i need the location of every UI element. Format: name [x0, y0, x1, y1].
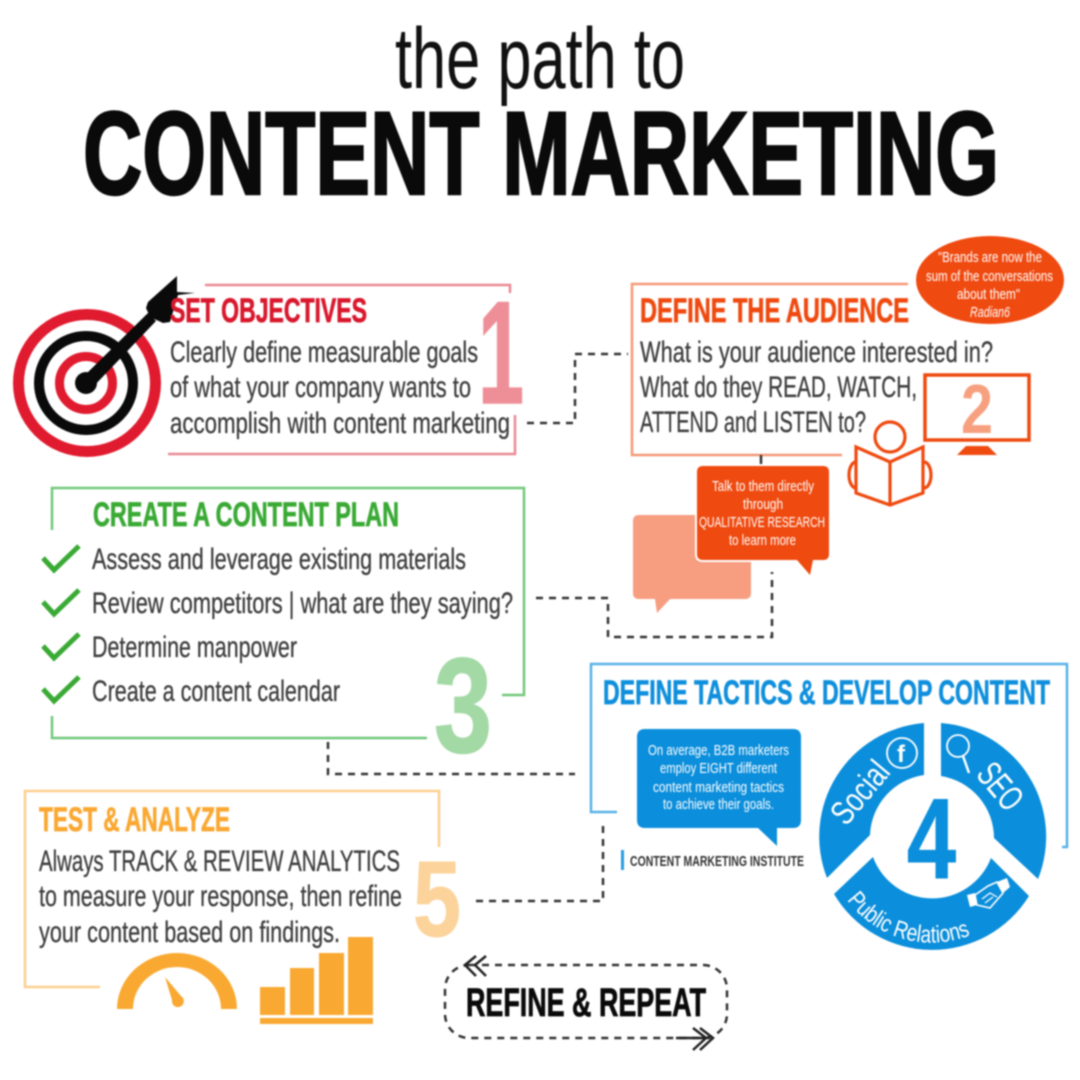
- title: the path to: [395, 11, 685, 107]
- chart: tactics wheel: [818, 722, 1048, 951]
- speech bubble: B2B statistic: content marketing tactics: [653, 779, 784, 796]
- segment: social: [819, 723, 924, 878]
- text: objectives description: of what your company wants to: [170, 371, 471, 404]
- connector: step 2 to step 3: [536, 572, 772, 637]
- text: analytics description: to measure your response, then refine: [39, 880, 402, 913]
- icon: check marks: [43, 546, 79, 701]
- speech bubble: qualitative research: QUALITATIVE RESEARCH: [699, 514, 825, 531]
- text: objectives description: [170, 336, 510, 440]
- segment: social: Social: [823, 753, 898, 832]
- speech bubble: salmon: [633, 515, 751, 613]
- checklist: [43, 543, 513, 708]
- source: content marketing institute: [621, 850, 804, 870]
- text: objectives description: accomplish with content marketing: [170, 407, 510, 440]
- icon: bar chart: [260, 937, 373, 1024]
- heading: create a content plan: CREATE A CONTENT PLAN: [93, 496, 399, 534]
- speech bubble: qualitative research: Talk to them directly: [712, 478, 814, 495]
- number 4: 4: [907, 776, 956, 903]
- speech bubble: qualitative research: to learn more: [729, 532, 796, 549]
- speech bubble: B2B statistic: On average, B2B marketers: [648, 742, 789, 759]
- connector: panel to speech bubble: [760, 455, 762, 466]
- title: [83, 11, 999, 220]
- text: objectives description: Clearly define measurable goals: [170, 336, 478, 369]
- segment: SEO: [941, 723, 1046, 879]
- text: audience questions: What do they READ, WATCH,: [640, 371, 917, 404]
- text: analytics description: Always TRACK & REVIEW ANALYTICS: [39, 845, 400, 878]
- speech bubble: B2B statistic: employ EIGHT different: [660, 760, 778, 777]
- icon: monitor with number 2: [925, 370, 1029, 455]
- panel: define the audience: [632, 236, 1064, 613]
- text: checklist items: [92, 543, 513, 708]
- quote ellipse: "Brands are now the: [938, 249, 1042, 266]
- text: checklist items: Review competitors | what are they saying?: [92, 587, 513, 620]
- connector: step 4 to step 5: [476, 822, 603, 901]
- number 3: 3: [434, 630, 492, 781]
- panel: create a content plan: [43, 488, 524, 781]
- source: content marketing institute: CONTENT MARKETING INSTITUTE: [630, 853, 804, 870]
- segment: social: f: [897, 741, 906, 768]
- panel: define tactics and develop content: [588, 662, 1070, 951]
- icon: person reading: [849, 422, 931, 505]
- heading: set objectives: SET OBJECTIVES: [170, 292, 367, 330]
- quote ellipse: about them": [957, 286, 1020, 303]
- connector: step 1 to step 2: [527, 354, 628, 423]
- icon: forward chevrons: [676, 1028, 713, 1050]
- text: analytics description: [39, 845, 402, 949]
- text: checklist items: Assess and leverage existing materials: [92, 543, 466, 576]
- speech bubble: qualitative research: [697, 466, 829, 575]
- number 1: 1: [478, 271, 524, 434]
- label: refine and repeat: REFINE & REPEAT: [466, 981, 706, 1025]
- icon: monitor with number 2: 2: [961, 370, 993, 448]
- text: audience questions: [640, 336, 993, 439]
- number 5: 5: [413, 838, 461, 959]
- text: audience questions: ATTEND and LISTEN to?: [640, 406, 866, 439]
- text: checklist items: Determine manpower: [92, 631, 297, 664]
- quote ellipse: Radian6: [970, 304, 1010, 321]
- segment: public relations: Public Relations: [847, 890, 970, 944]
- panel: set objectives: [18, 271, 524, 454]
- badge: refine and repeat: [445, 956, 727, 1050]
- speech bubble: B2B statistic: [637, 729, 801, 846]
- speech bubble: qualitative research: through: [743, 496, 783, 513]
- icon: back chevrons: [465, 956, 486, 976]
- quote ellipse: [916, 236, 1064, 324]
- connector: step 3 to step 4: [328, 742, 575, 774]
- panel: test and analyze: [25, 791, 461, 1024]
- segment: SEO: SEO: [969, 754, 1032, 818]
- text: analytics description: your content based on findings.: [39, 916, 340, 949]
- text: checklist items: Create a content calendar: [92, 675, 340, 708]
- icon: target with arrow: [18, 276, 195, 452]
- segment: public relations: [833, 856, 1030, 951]
- heading: test and analyze: TEST & ANALYZE: [39, 801, 230, 839]
- speech bubble: B2B statistic: to achieve their goals.: [663, 796, 774, 813]
- heading: define the audience: DEFINE THE AUDIENCE: [640, 292, 909, 330]
- icon: gauge: [117, 953, 237, 1009]
- icon: handshake: [967, 878, 1010, 908]
